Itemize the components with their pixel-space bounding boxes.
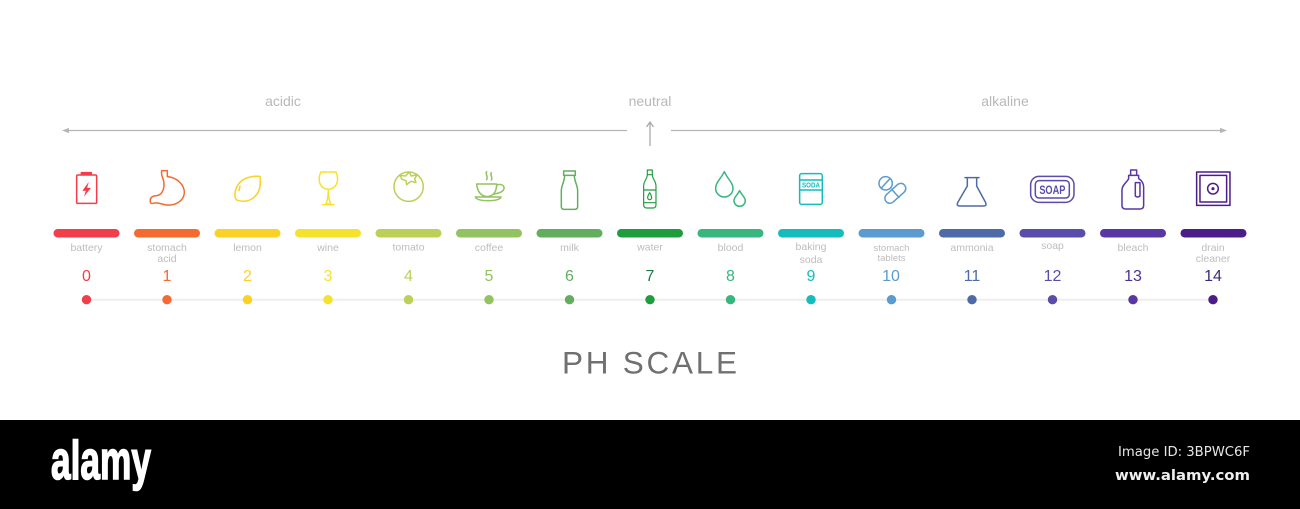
label: drain [1201, 242, 1225, 254]
website: www.alamy.com [1115, 468, 1250, 484]
column: pH 2 lemon [214, 176, 280, 304]
label: cleaner [1196, 253, 1231, 265]
icon: drain [1197, 172, 1230, 205]
label: tablets [878, 253, 906, 264]
color bar [54, 229, 120, 238]
column: pH 10 stomach tablets [858, 177, 924, 304]
number: 0 [82, 268, 91, 285]
color bar [1020, 229, 1086, 238]
number: 14 [1204, 268, 1222, 285]
color bar [214, 229, 280, 238]
icon: pills [879, 177, 908, 205]
color bar [1100, 229, 1166, 238]
dot [645, 295, 655, 304]
column: pH 9 baking soda [778, 174, 844, 304]
dot [1128, 295, 1138, 304]
column: pH 4 tomato [376, 172, 442, 304]
number: 4 [404, 268, 413, 285]
color bar [376, 229, 442, 238]
image id: Image ID: 3BPWC6F [1118, 445, 1250, 460]
column: pH 0 battery [54, 173, 120, 304]
dot [726, 295, 735, 304]
column: pH 6 milk [536, 171, 602, 304]
column: pH 3 wine [295, 172, 361, 304]
icon: blood drops [716, 172, 745, 206]
label: coffee [475, 242, 503, 254]
icon: water bottle [644, 170, 656, 208]
label: ammonia [950, 242, 994, 254]
label: lemon [233, 242, 262, 254]
label: battery [70, 242, 103, 254]
label: tomato [392, 242, 425, 254]
label: soap [1041, 240, 1064, 252]
color bar [617, 229, 683, 238]
dot [565, 295, 574, 304]
dot [1048, 295, 1057, 304]
icon: wine glass [319, 172, 338, 205]
number: 12 [1044, 268, 1062, 285]
number: 6 [565, 268, 574, 285]
label: stomach [874, 243, 909, 254]
column: pH 14 drain cleaner [1180, 172, 1246, 304]
heading: neutral: neutral [629, 93, 671, 109]
column: pH 12 soap [1020, 176, 1086, 304]
footer band [0, 420, 1300, 509]
icon: tomato [394, 172, 423, 201]
icon: milk bottle [561, 171, 578, 209]
icon: soda box: SODA [802, 183, 820, 190]
icon: stomach [150, 171, 184, 205]
column: pH 11 ammonia [939, 178, 1005, 304]
label: water [636, 242, 663, 254]
number: 2 [243, 268, 252, 285]
color bar [134, 229, 200, 238]
number: 8 [726, 268, 735, 285]
color bar [295, 229, 361, 238]
dot [82, 295, 91, 304]
number: 11 [964, 268, 980, 285]
label: wine [316, 242, 339, 254]
color bar [456, 229, 522, 238]
label: baking [796, 241, 826, 253]
number: 9 [807, 268, 816, 285]
color bar [858, 229, 924, 238]
dot [806, 295, 816, 304]
icon: lemon [235, 176, 260, 201]
label: soda [800, 254, 823, 266]
number: 10 [882, 268, 900, 285]
dot [1208, 295, 1218, 304]
number: 7 [646, 268, 655, 285]
dot [404, 295, 413, 304]
number: 3 [324, 268, 333, 285]
color bar [536, 229, 602, 238]
heading: alkaline: alkaline [981, 93, 1029, 109]
column: pH 13 bleach [1100, 170, 1166, 304]
label: blood [718, 242, 744, 254]
icon: soap bar: SOAP [1039, 183, 1065, 197]
arrow: neutral pointer [646, 122, 654, 146]
label: acid [157, 253, 177, 265]
dot [887, 295, 896, 304]
label: milk [560, 242, 580, 254]
color bar [698, 229, 764, 238]
logo: alamy: alamy [51, 429, 151, 491]
column: pH 7 water [617, 170, 683, 304]
column: pH 5 coffee [456, 172, 522, 304]
icon: bleach bottle [1122, 170, 1144, 209]
icon: flask [957, 178, 986, 206]
dot [484, 295, 494, 304]
dot [243, 295, 252, 304]
number: 5 [485, 268, 494, 285]
dot [323, 295, 333, 304]
icon: battery [77, 173, 97, 203]
color bar [778, 229, 844, 238]
dot [967, 295, 977, 304]
color bar [939, 229, 1005, 238]
column: pH 1 stomach acid [134, 171, 200, 304]
arrow: toward alkaline [671, 128, 1227, 133]
dot [162, 295, 172, 304]
icon: coffee cup [475, 172, 504, 201]
heading: acidic: acidic [265, 93, 301, 109]
number: 1 [163, 268, 172, 285]
arrow: toward acidic [62, 128, 627, 133]
label: bleach [1118, 242, 1149, 254]
number: 13 [1124, 268, 1142, 285]
color bar [1180, 229, 1246, 238]
column: pH 8 blood [698, 172, 764, 304]
title: PH SCALE [562, 344, 737, 380]
label: stomach [147, 242, 187, 254]
